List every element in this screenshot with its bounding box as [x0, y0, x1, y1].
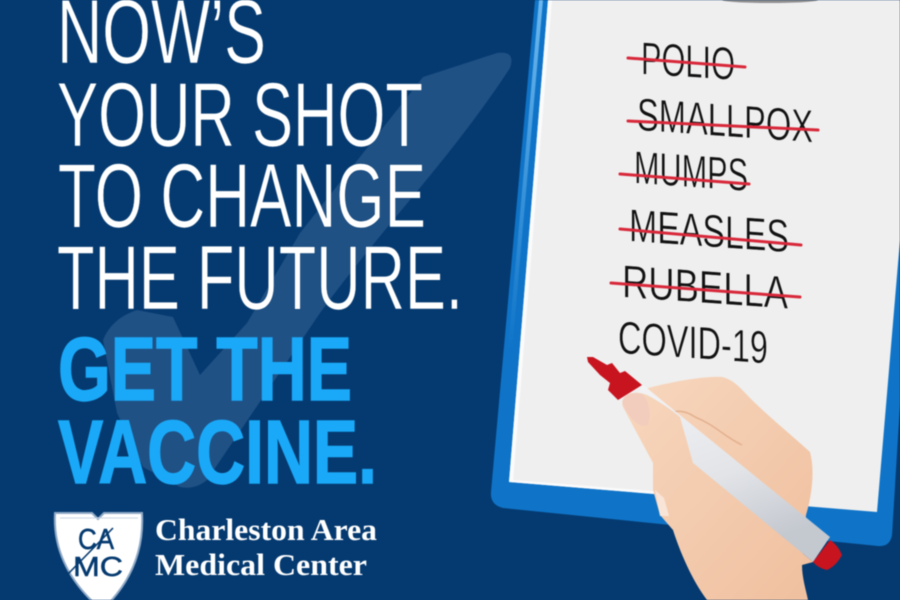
- logo wordmark: [155, 512, 378, 582]
- headline: THE FUTURE.: [57, 228, 463, 329]
- handwritten disease list: POLIO: [641, 32, 735, 90]
- call to action: [58, 320, 377, 503]
- marker end cap: [813, 540, 842, 570]
- handwritten disease list: MUMPS: [634, 141, 748, 201]
- handwritten disease list: MEASLES: [629, 199, 789, 262]
- marker tip: [587, 357, 642, 400]
- handwritten disease list: SMALLPOX: [637, 88, 813, 152]
- call to action: VACCINE.: [58, 403, 377, 503]
- logo wordmark: Medical Center: [155, 547, 367, 582]
- fingernail: [623, 393, 650, 426]
- handwritten disease list: RUBELLA: [622, 255, 788, 319]
- headline: TO CHANGE: [58, 146, 426, 247]
- hand holding red marker: [587, 357, 842, 600]
- finger crease: [672, 411, 742, 445]
- marker body: [630, 385, 830, 562]
- thumb nail: [655, 490, 669, 516]
- clipboard: [491, 0, 900, 546]
- paper: [509, 0, 900, 512]
- index finger and palm: [622, 393, 813, 600]
- clip shadow: [722, 0, 818, 3]
- headline: YOUR SHOT: [57, 65, 423, 166]
- handwritten disease list: [618, 32, 813, 373]
- logo: CAMC shield: MC: [73, 551, 123, 582]
- headline: [57, 0, 463, 329]
- logo: CAMC shield: [55, 513, 142, 600]
- watermark check mark: [103, 53, 511, 488]
- back of hand: [648, 377, 813, 560]
- handwritten disease list: COVID-19: [618, 311, 768, 373]
- red strike-through lines: [611, 58, 818, 297]
- logo wordmark: Charleston Area: [155, 512, 378, 547]
- logo: CAMC shield: CA: [78, 524, 115, 556]
- call to action: GET THE: [58, 320, 352, 420]
